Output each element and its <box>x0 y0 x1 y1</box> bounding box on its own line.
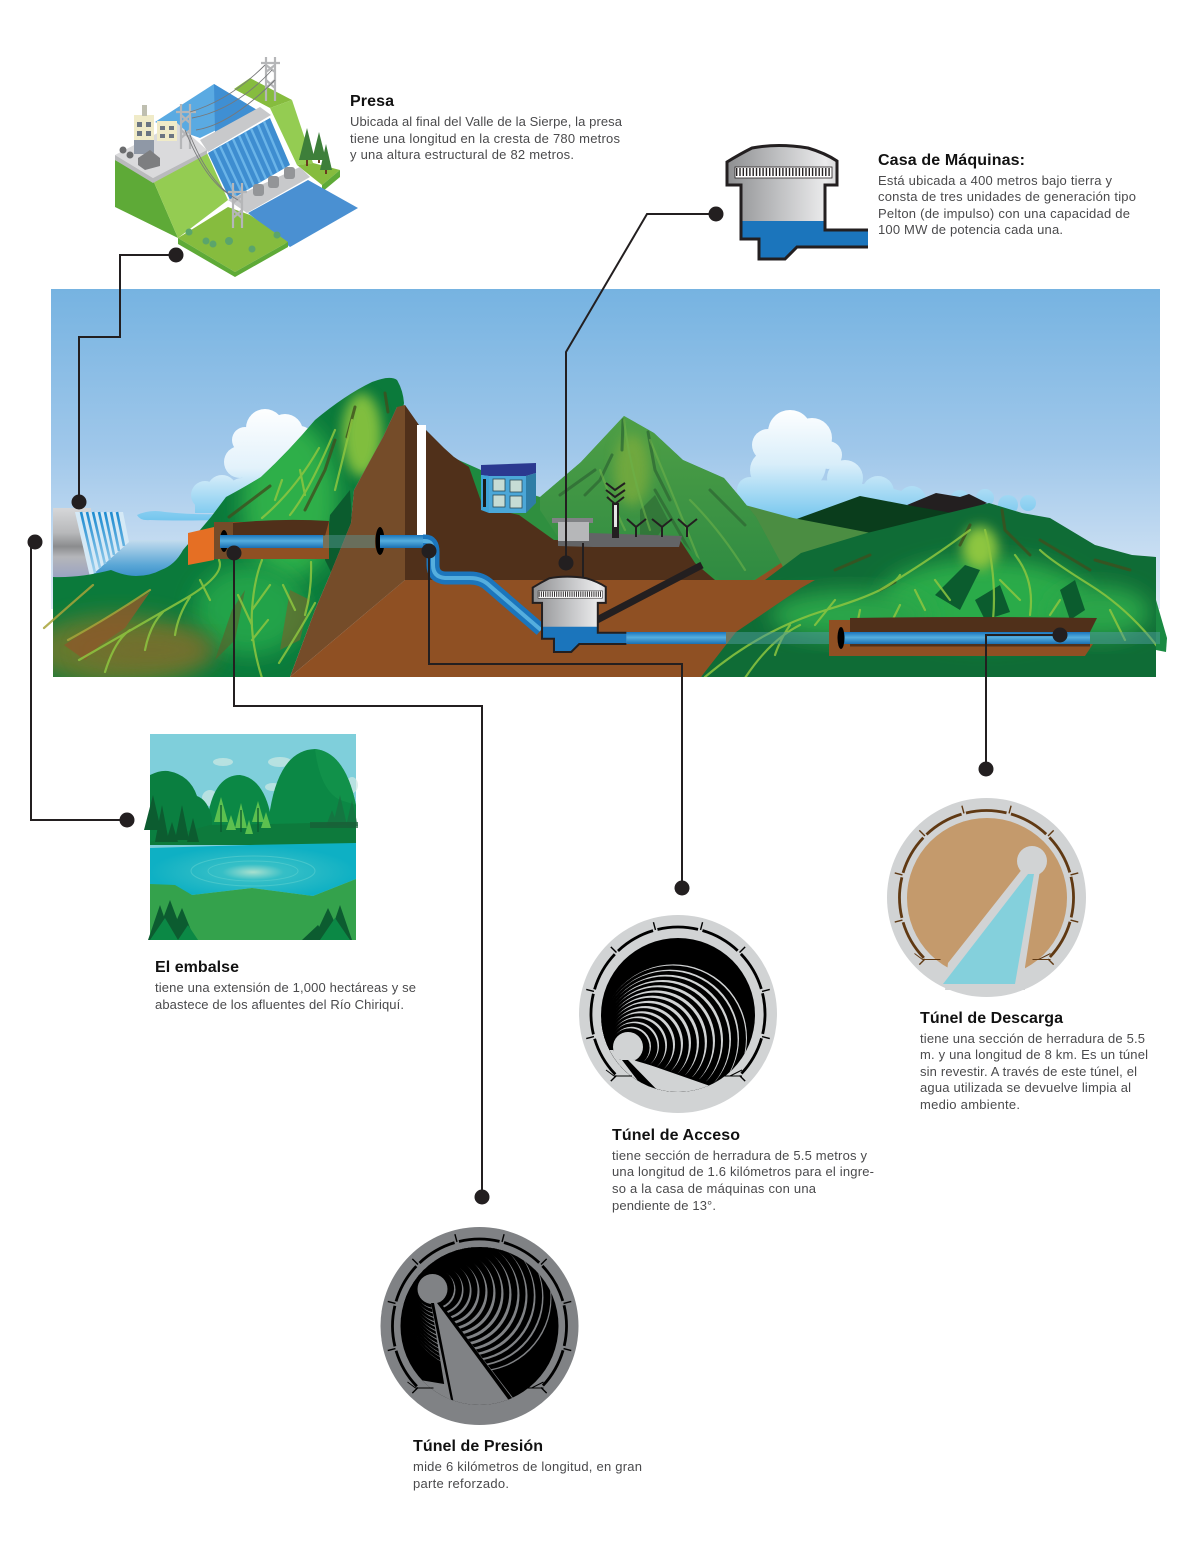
sky <box>51 289 1160 609</box>
body: Casa de Máquinas <box>878 173 1136 237</box>
body: El embalse: tiene una extensión de 1,000 hectáreas y se <box>155 980 416 995</box>
surface platform with towers <box>552 483 697 577</box>
distant dark hills <box>745 493 1000 585</box>
body: Túnel de Acceso: tiene sección de herradura de 5.5 metros y <box>612 1148 868 1163</box>
body: Túnel de Presión <box>413 1459 642 1491</box>
connector: presa <box>72 248 184 510</box>
body: Casa de Máquinas: consta de tres unidades de generación tipo <box>878 189 1136 204</box>
dark brown rock section <box>405 405 715 580</box>
illustration: el embalse <box>144 734 358 940</box>
icon: túnel de descarga <box>864 775 1109 1020</box>
body: El embalse: abastece de los afluentes del Río Chiriquí. <box>155 997 404 1012</box>
connector: túnel de descarga <box>978 628 1068 776</box>
heading: Casa de Máquinas: Casa de Máquinas: <box>878 152 1025 169</box>
text block: El embalse <box>155 959 416 1012</box>
body: Casa de Máquinas: Pelton (de impulso) con una capacidad de <box>878 206 1130 221</box>
text block: Túnel de Descarga <box>920 1010 1148 1112</box>
green patch behind building <box>454 458 484 510</box>
right mountain <box>701 503 1156 677</box>
panel: main landscape cross-section <box>30 289 1167 685</box>
discharge tunnel <box>829 617 1160 656</box>
heading: Túnel de Presión: Túnel de Presión <box>413 1438 543 1455</box>
brown wedge at valley <box>752 563 790 582</box>
body: Túnel de Presión: parte reforzado. <box>413 1476 509 1491</box>
text block: Presa <box>350 93 623 162</box>
body: Presa: tiene una longitud en la cresta de 780 metros <box>350 131 620 146</box>
heading: Túnel de Acceso: Túnel de Acceso <box>612 1127 740 1144</box>
access building <box>481 463 536 513</box>
body: Presa: y una altura estructural de 82 metros. <box>350 147 574 162</box>
body: Túnel de Acceso: una longitud de 1.6 kilómetros para el ingre- <box>612 1164 874 1179</box>
body: Túnel de Descarga: tiene una sección de herradura de 5.5 <box>920 1031 1145 1046</box>
right mountain edge <box>1156 600 1167 652</box>
connector: túnel de acceso <box>422 544 690 896</box>
body: Casa de Máquinas: 100 MW de potencia cada una. <box>878 222 1063 237</box>
icon: túnel de acceso <box>579 915 777 1113</box>
cloud left <box>137 409 314 520</box>
body: Túnel de Descarga: agua utilizada se devuelve limpia al <box>920 1080 1131 1095</box>
body: Túnel de Acceso: so a la casa de máquinas con una <box>612 1181 817 1196</box>
powerhouse small <box>533 577 626 652</box>
body: Casa de Máquinas: Está ubicada a 400 metros bajo tierra y <box>878 173 1112 188</box>
connector: túnel de presión <box>226 546 490 1204</box>
reservoir water <box>85 540 205 582</box>
white shaft <box>417 425 426 535</box>
body: Túnel de Descarga: medio ambiente. <box>920 1097 1020 1112</box>
icon: túnel de presión <box>380 1227 578 1425</box>
body: Túnel de Presión: mide 6 kilómetros de longitud, en gran <box>413 1459 642 1474</box>
ground brown <box>290 580 815 677</box>
icon: dam isometric <box>115 57 358 277</box>
body: Túnel de Descarga: sin revestir. A través de este túnel, el <box>920 1064 1137 1079</box>
center mountain <box>454 416 781 582</box>
cloud right <box>737 410 1036 520</box>
tailrace pipe <box>597 632 838 644</box>
left mountain <box>30 375 413 685</box>
brown rock face <box>290 405 405 677</box>
left tunnel <box>188 520 329 565</box>
body: Túnel de Acceso <box>612 1148 874 1213</box>
body: Túnel de Descarga: m. y una longitud de 8 km. Es un túnel <box>920 1047 1148 1062</box>
penstock pipe <box>220 527 541 630</box>
text block: Túnel de Presión <box>413 1438 642 1491</box>
body: Presa <box>350 114 623 162</box>
text block: Túnel de Acceso <box>612 1127 874 1213</box>
connector: casa de máquinas <box>558 206 724 570</box>
body: Túnel de Acceso: pendiente de 13°. <box>612 1198 716 1213</box>
slanted access tunnel <box>597 565 702 620</box>
body: Presa: Ubicada al final del Valle de la Sierpe, la presa <box>350 114 623 129</box>
connector: embalse <box>28 534 134 828</box>
dam spillway <box>75 512 129 577</box>
heading: Túnel de Descarga: Túnel de Descarga <box>920 1010 1063 1027</box>
text block: Casa de Máquinas <box>878 152 1136 237</box>
icon: casa de máquinas <box>727 146 868 259</box>
body: Túnel de Descarga <box>920 1031 1148 1112</box>
heading: El embalse: El embalse <box>155 959 239 976</box>
body: El embalse <box>155 980 416 1012</box>
heading: Presa: Presa <box>350 93 394 110</box>
dam wall <box>53 508 91 578</box>
